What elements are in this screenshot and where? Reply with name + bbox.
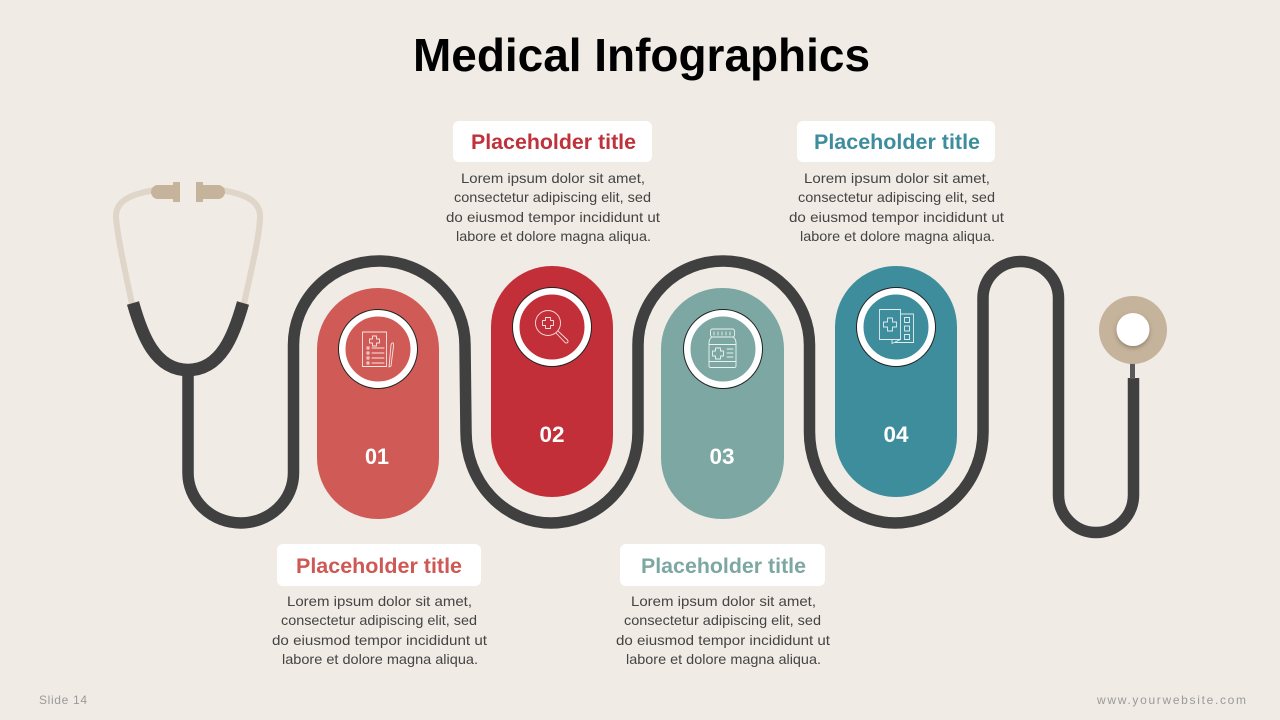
panel: step 03 [661,288,784,519]
footer: website: www.yourwebsite.com [1096,693,1246,707]
panel: step 02 [491,266,613,497]
title: Medical Infographics [413,29,870,81]
chest piece stem [1130,362,1135,379]
heading 03: Placeholder title [641,555,806,578]
callout: step 04 [789,121,1004,244]
chest piece [1099,296,1167,364]
heading 01: Placeholder title [296,555,462,578]
label box 03 [620,544,825,586]
stethoscope [116,182,1167,532]
callout: step 03 [616,544,830,667]
ear pieces [151,182,225,202]
pill 01 [317,288,439,519]
number 03: 03 [710,444,734,469]
body text 04 [789,170,1004,244]
callout: step 02 [446,121,660,244]
icon: prescription and pills [880,310,914,344]
body text 04: Lorem ipsum dolor sit amet, [804,170,990,186]
label box 02 [453,121,652,162]
body text 01: consectetur adipiscing elit, sed [281,612,477,628]
panel: step 04 [835,266,957,497]
heading 02: Placeholder title [471,131,636,154]
number 04: 04 [884,422,909,447]
icon: medical report [362,332,394,367]
label box 04 [797,121,995,162]
body text 04: labore et dolore magna aliqua. [800,228,995,244]
body text 04: do eiusmod tempor incididunt ut [789,209,1004,225]
pill 03 [661,288,784,519]
body text 02: consectetur adipiscing elit, sed [454,189,651,205]
number 01: 01 [365,444,389,469]
body text 02 [446,170,660,244]
body text 02: Lorem ipsum dolor sit amet, [461,170,645,186]
callout: step 01 [272,544,487,667]
body text 03 [616,593,830,667]
label box 01 [277,544,481,586]
body text 01 [272,593,487,667]
body text 02: labore et dolore magna aliqua. [456,228,651,244]
body text 04: consectetur adipiscing elit, sed [798,189,995,205]
number 02: 02 [540,422,564,447]
icon: magnifier with cross [536,310,568,343]
body text 01: Lorem ipsum dolor sit amet, [287,593,472,609]
heading 04: Placeholder title [814,131,980,154]
body text 01: do eiusmod tempor incididunt ut [272,632,487,648]
icon ring 04 [860,291,932,363]
icon: medicine bottle [709,329,736,368]
body text 03: labore et dolore magna aliqua. [626,651,821,667]
body text 03: consectetur adipiscing elit, sed [624,612,821,628]
icon ring 03 [687,313,759,385]
panel: step 01 [317,288,439,519]
pill 02 [491,266,613,497]
headset yoke [133,303,243,370]
body text 03: do eiusmod tempor incididunt ut [616,632,830,648]
winding tube [188,261,1134,532]
icon ring 02 [516,291,588,363]
pill 04 [835,266,957,497]
body text 01: labore et dolore magna aliqua. [282,651,478,667]
footer: slide number: Slide 14 [39,693,87,707]
body text 02: do eiusmod tempor incididunt ut [446,209,660,225]
body text 03: Lorem ipsum dolor sit amet, [631,593,816,609]
ear tubes [116,190,260,304]
icon ring 01 [342,313,414,385]
